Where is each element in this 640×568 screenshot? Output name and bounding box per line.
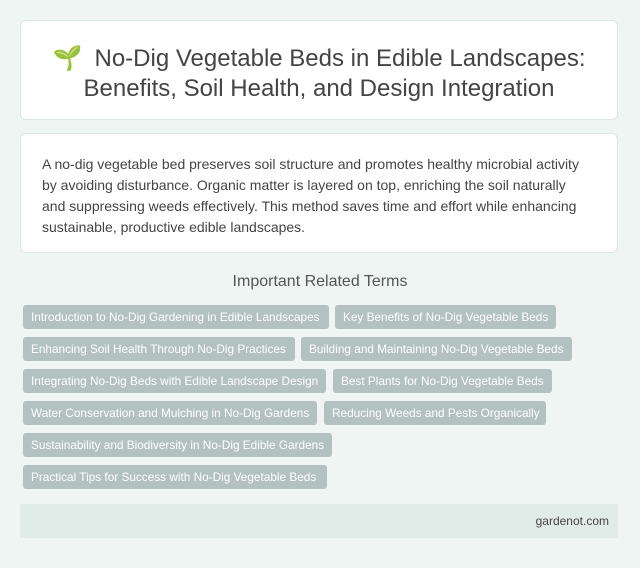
- footer: gardenot.com: [536, 514, 609, 528]
- title: No-Dig Vegetable Beds in Edible Landscapes:: [94, 45, 586, 72]
- icon: sprout: 🌱: [52, 45, 82, 72]
- title card: [20, 20, 618, 120]
- related terms tags: Practical Tips for Success with No-Dig Vegetable Beds: [31, 470, 316, 484]
- related terms tags: Sustainability and Biodiversity in No-Dig Edible Gardens: [31, 438, 324, 452]
- title: Benefits, Soil Health, and Design Integration: [84, 75, 554, 102]
- description card: [20, 133, 618, 253]
- related terms tags: Reducing Weeds and Pests Organically: [332, 406, 540, 420]
- related terms tags: Building and Maintaining No-Dig Vegetable Beds: [309, 342, 563, 356]
- title: [52, 45, 586, 102]
- related terms tags: Best Plants for No-Dig Vegetable Beds: [341, 374, 544, 388]
- related terms tags: Key Benefits of No-Dig Vegetable Beds: [343, 310, 548, 324]
- footer: [20, 504, 618, 538]
- related terms tags: Introduction to No-Dig Gardening in Edible Landscapes: [31, 310, 320, 324]
- related terms tags: Integrating No-Dig Beds with Edible Landscape Design: [31, 374, 318, 388]
- related terms tags: Enhancing Soil Health Through No-Dig Practices: [31, 342, 286, 356]
- section heading: Important Related Terms: [233, 273, 407, 290]
- related terms tags: Water Conservation and Mulching in No-Dig Gardens: [31, 406, 309, 420]
- description text: A no-dig vegetable bed preserves soil structure and promotes healthy microbial activity by avoiding disturbance. Organic matter is layered on top, enriching the soil naturally and suppressing weeds effectively. This method saves time and effort while enhancing sustainable, productive edible landscapes.: [42, 156, 579, 235]
